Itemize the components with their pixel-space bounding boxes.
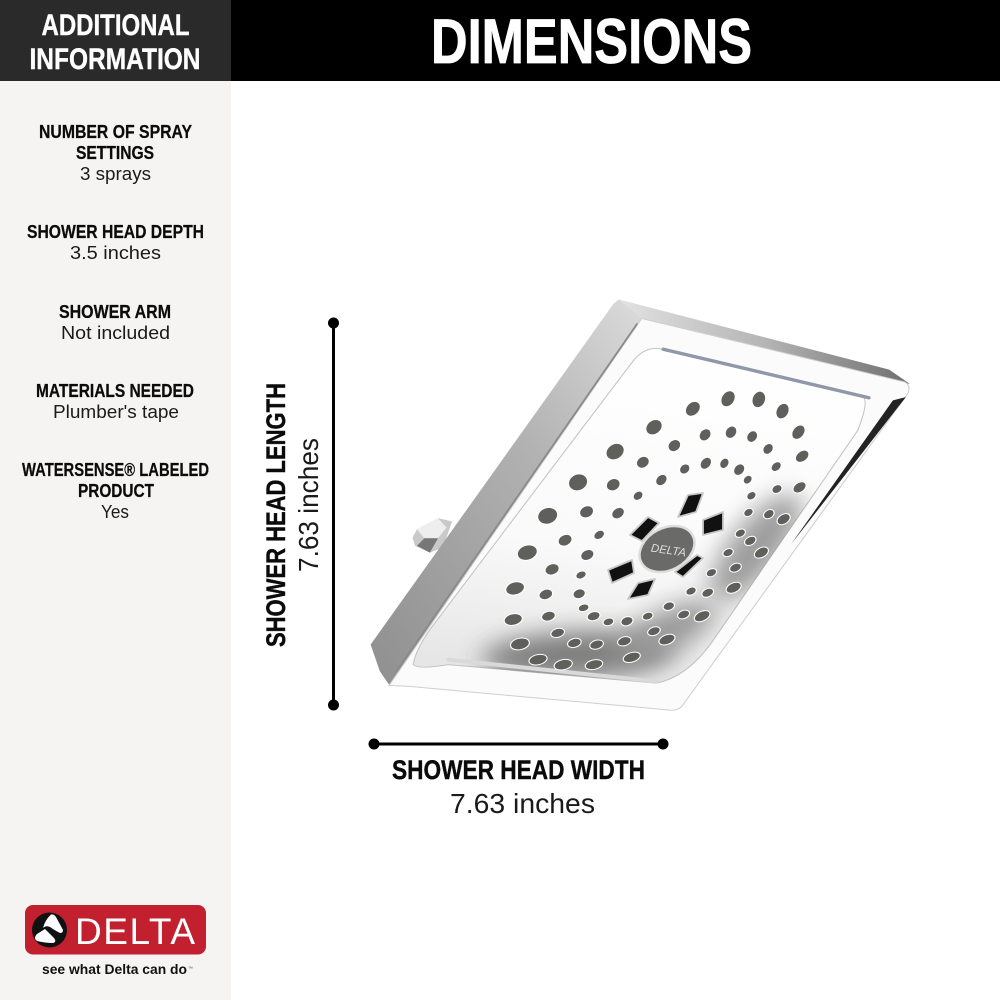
- dimension: width label: 7.63 inches: [450, 788, 595, 819]
- head top bevel: [619, 299, 910, 384]
- header: dimensions: DIMENSIONS: [431, 7, 752, 77]
- spec: number of spray settings: 3 sprays: [80, 163, 151, 184]
- rim highlight: [397, 323, 637, 671]
- header: additional information: INFORMATION: [30, 43, 200, 76]
- spec: number of spray settings: SETTINGS: [76, 143, 154, 163]
- dimension: length label: 7.63 inches: [293, 438, 324, 572]
- spec: watersense labeled product: PRODUCT: [78, 481, 154, 501]
- sidebar panel: [0, 81, 231, 1000]
- logo: Delta: DELTA: [75, 911, 195, 952]
- dish bottom slot: [448, 660, 656, 681]
- right edge shadow: [791, 397, 906, 544]
- dimension: width label: SHOWER HEAD WIDTH: [392, 755, 645, 785]
- spec: shower arm: Not included: [61, 322, 170, 343]
- spec: materials needed: [36, 381, 194, 422]
- logo: Delta: see what Delta can do: [42, 961, 187, 977]
- dimension: width label: [392, 755, 645, 819]
- header: additional information: [0, 0, 231, 81]
- head front face: [389, 318, 909, 710]
- spec: materials needed: MATERIALS NEEDED: [36, 381, 194, 401]
- spec: shower head depth: SHOWER HEAD DEPTH: [27, 222, 204, 242]
- center badge: [632, 517, 702, 581]
- spray dish: [413, 348, 865, 683]
- center jets: [608, 493, 723, 599]
- spec: number of spray settings: NUMBER OF SPRAY: [39, 122, 192, 142]
- center badge: DELTA: [650, 543, 687, 559]
- dimension: width arrow: [368, 738, 668, 750]
- dimension: length arrow: [328, 318, 339, 710]
- dimension: length label: [261, 383, 324, 647]
- spray nozzles: [503, 389, 812, 672]
- header: additional information: ADDITIONAL: [42, 9, 190, 42]
- spec: watersense labeled product: Yes: [101, 501, 129, 522]
- shower arm connector: [412, 518, 452, 553]
- spec: watersense labeled product: [22, 460, 209, 522]
- header: dimensions: [231, 0, 1000, 81]
- logo: Delta: ™: [188, 966, 193, 972]
- shower head illustration: [371, 299, 910, 710]
- head body side: [371, 299, 643, 685]
- spec: watersense labeled product: WATERSENSE® LABELED: [22, 460, 209, 480]
- dish reflections: [481, 482, 817, 683]
- spec: shower arm: SHOWER ARM: [59, 302, 171, 322]
- spec: number of spray settings: [39, 122, 192, 184]
- dimension: length label: SHOWER HEAD LENGTH: [261, 383, 291, 647]
- spec: shower head depth: 3.5 inches: [70, 242, 161, 263]
- icon: Delta triangle mark: [32, 912, 67, 948]
- logo: Delta: [25, 905, 206, 977]
- spec: shower arm: [59, 302, 171, 343]
- dish top slot: [663, 349, 869, 398]
- spec: shower head depth: [27, 222, 204, 263]
- spec: materials needed: Plumber's tape: [53, 401, 179, 422]
